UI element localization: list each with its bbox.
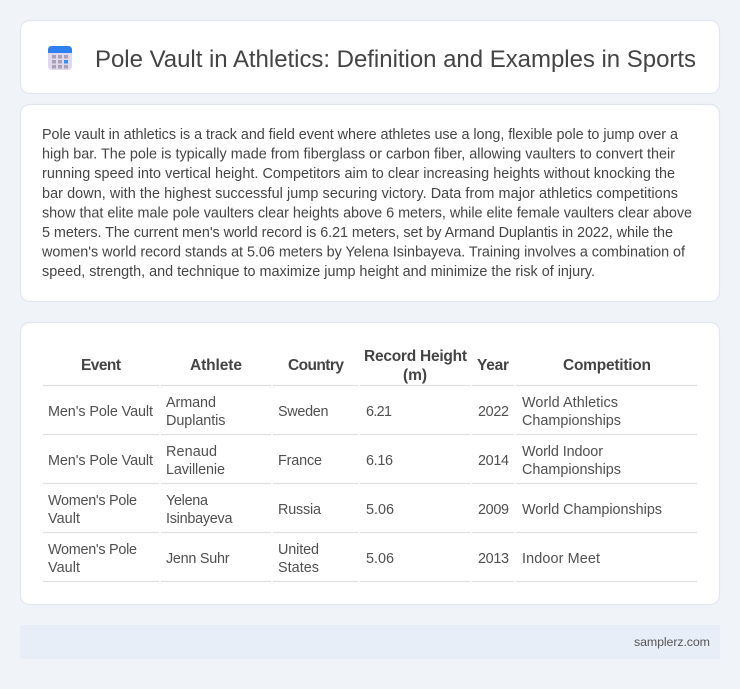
table row: Armand Duplantis: World Athletics <box>522 395 618 411</box>
text block: description paragraph: high bar. The pole is typically made from fiberglass or carbon fiber, allowing vaulters to convert their <box>42 147 675 163</box>
table row: Armand Duplantis <box>48 395 621 429</box>
table row: Yelena Isinbayeva: Isinbayeva <box>166 511 232 527</box>
table row: Armand Duplantis: 2022 <box>478 404 509 420</box>
table row: Armand Duplantis: Armand <box>166 395 216 411</box>
table row: Yelena Isinbayeva: 5.06 <box>366 502 394 518</box>
text block: description paragraph: women's world record stands at 5.06 meters by Yelena Isinbayeva. Training involves a combination of <box>41 245 686 261</box>
text block: description paragraph: 5 meters. The current men's world record is 6.21 meters, set by Armand Duplantis in 2022, while the <box>42 225 673 241</box>
table row: Yelena Isinbayeva: Russia <box>278 502 321 518</box>
table row: Renaud Lavillenie: 6.16 <box>366 453 393 469</box>
text block: description paragraph: bar down, with the highest successful jump securing victory. Data from major athletics competitions <box>42 186 678 202</box>
table row: Renaud Lavillenie <box>48 444 621 478</box>
text block: description paragraph <box>41 127 692 280</box>
table row: Jenn Suhr: 5.06 <box>366 551 394 567</box>
table row: Jenn Suhr: Vault <box>48 560 80 576</box>
table row: Jenn Suhr <box>48 542 600 576</box>
table row: Jenn Suhr: Women's Pole <box>48 542 137 558</box>
table row: Jenn Suhr: States <box>278 560 319 576</box>
panel: title card <box>20 20 720 94</box>
table row: Renaud Lavillenie: France <box>278 453 322 469</box>
footer credit: samplerz.com <box>634 635 710 649</box>
table row: Renaud Lavillenie: Men's Pole Vault <box>48 453 153 469</box>
table header: Year <box>477 357 509 374</box>
table row: Renaud Lavillenie: Championships <box>522 462 621 478</box>
table row: Yelena Isinbayeva: 2009 <box>478 502 509 518</box>
table row: Armand Duplantis: Championships <box>522 413 621 429</box>
text block: description paragraph: running speed into vertical height. Competitors aim to clear increasing heights without knocking the <box>42 166 675 182</box>
table row: Renaud Lavillenie: Renaud <box>166 444 217 460</box>
table row: Armand Duplantis: Duplantis <box>166 413 226 429</box>
table row: Renaud Lavillenie: World Indoor <box>522 444 603 460</box>
table header: Country <box>288 357 344 374</box>
title: Pole Vault in Athletics: Definition and Examples in Sports <box>95 46 696 73</box>
table row: Jenn Suhr: 2013 <box>478 551 509 567</box>
table row: Jenn Suhr: Jenn Suhr <box>166 551 230 567</box>
table header: (m) <box>403 367 427 384</box>
table row: Armand Duplantis: 6.21 <box>366 404 392 420</box>
table row: Jenn Suhr: United <box>278 542 319 558</box>
table header: Competition <box>563 357 651 374</box>
text block: description paragraph: show that elite male pole vaulters clear heights above 6 meters, while elite female vaulters clear above <box>42 205 692 221</box>
table row rules <box>43 386 697 582</box>
panel: records table <box>20 322 720 604</box>
table row: Renaud Lavillenie: Lavillenie <box>166 462 225 478</box>
table row: Yelena Isinbayeva: Yelena <box>166 493 208 509</box>
footer bar <box>20 625 720 659</box>
table row: Yelena Isinbayeva: World Championships <box>522 502 662 518</box>
table header <box>81 348 651 384</box>
panel: description <box>20 104 720 302</box>
table row: Armand Duplantis: Men's Pole Vault <box>48 404 153 420</box>
text block: description paragraph: speed, strength, and technique to maximize jump height and minimize the risk of injury. <box>42 264 595 280</box>
table row: Yelena Isinbayeva <box>48 493 662 527</box>
text block: description paragraph: Pole vault in athletics is a track and field event where athletes use a long, flexible pole to jump over a <box>42 127 678 143</box>
icon: calendar <box>48 46 72 70</box>
table row: Armand Duplantis: Sweden <box>278 404 328 420</box>
table header: Event <box>81 357 121 374</box>
table row: Jenn Suhr: Indoor Meet <box>522 551 600 567</box>
table row: Yelena Isinbayeva: Women's Pole <box>48 493 137 509</box>
table row: Yelena Isinbayeva: Vault <box>48 511 80 527</box>
table header: Athlete <box>190 357 242 374</box>
table row: Renaud Lavillenie: 2014 <box>478 453 509 469</box>
table header: Record Height <box>364 348 467 365</box>
